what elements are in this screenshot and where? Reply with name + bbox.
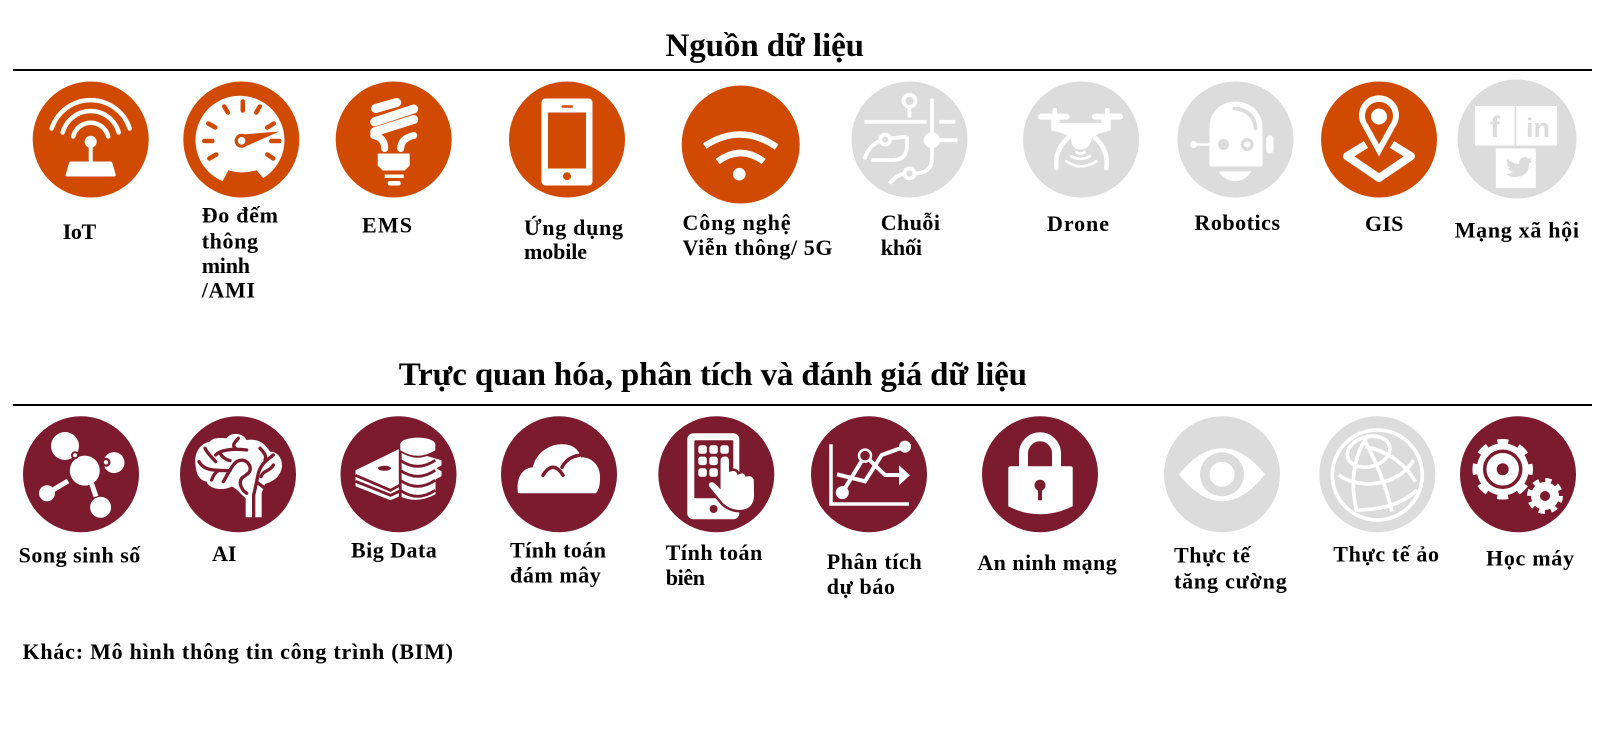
label: robotics: Robotics bbox=[1194, 210, 1280, 235]
label: cybersecurity: An ninh mạng bbox=[977, 550, 1117, 575]
label: smart meter: Đo đếm bbox=[202, 203, 278, 228]
label: edge computing: Tính toán bbox=[666, 540, 762, 565]
label: telecom 5G bbox=[682, 210, 832, 260]
icon: social media bbox=[1458, 80, 1576, 198]
label: mobile app: Ứng dụng bbox=[524, 215, 623, 240]
icon: EMS bulb bbox=[336, 82, 452, 198]
icon: GIS bbox=[1321, 82, 1437, 198]
label: predictive analytics: Phân tích bbox=[827, 549, 922, 574]
icon: edge computing bbox=[658, 416, 774, 532]
label: big data: Big Data bbox=[351, 537, 437, 562]
label: blockchain: Chuỗi bbox=[881, 210, 940, 235]
icon: machine learning gears bbox=[1460, 416, 1576, 532]
icon: predictive analytics bbox=[811, 416, 927, 532]
label: telecom 5G: Viễn thông/ 5G bbox=[682, 235, 832, 260]
label: mobile app bbox=[524, 215, 623, 264]
panel: visualization and analytics bbox=[19, 416, 1576, 599]
icon: augmented reality eye bbox=[1164, 416, 1280, 532]
icon: telecom 5G bbox=[682, 86, 800, 204]
icon: smart meter bbox=[183, 82, 299, 198]
icon: big data bbox=[340, 416, 456, 532]
label: AI: AI bbox=[212, 541, 236, 566]
label: digital twin: Song sinh số bbox=[19, 543, 141, 568]
label: augmented reality: Thực tế bbox=[1174, 543, 1251, 568]
label: augmented reality: tăng cường bbox=[1174, 568, 1287, 593]
label: GIS: GIS bbox=[1365, 211, 1403, 236]
note: other: Khác: Mô hình thông tin công trình (BIM) bbox=[22, 639, 453, 664]
label: smart meter bbox=[201, 203, 278, 303]
icon: social media: f bbox=[1490, 111, 1501, 144]
icon: social media: in bbox=[1526, 113, 1550, 143]
label: mobile app: mobile bbox=[524, 239, 587, 264]
label: edge computing: biên bbox=[666, 565, 705, 590]
icon: drone bbox=[1023, 82, 1139, 198]
label: virtual reality: Thực tế ảo bbox=[1333, 542, 1439, 567]
label: telecom 5G: Công nghệ bbox=[682, 210, 791, 235]
heading: visualization and analytics: Trực quan hóa, phân tích và đánh giá dữ liệu bbox=[399, 357, 1027, 393]
label: machine learning: Học máy bbox=[1486, 546, 1574, 571]
icon: AI brain bbox=[180, 416, 296, 532]
label: smart meter: thông bbox=[202, 228, 258, 253]
label: blockchain bbox=[881, 210, 940, 260]
label: augmented reality bbox=[1174, 543, 1287, 593]
label: smart meter: /AMI bbox=[201, 278, 255, 303]
label: predictive analytics bbox=[827, 549, 922, 599]
icon: blockchain bbox=[852, 82, 968, 198]
icon: mobile app bbox=[509, 82, 625, 198]
label: IoT: IoT bbox=[63, 219, 97, 244]
label: cloud computing: đám mây bbox=[510, 563, 601, 588]
icon: cloud computing bbox=[501, 416, 617, 532]
icon: virtual reality globe bbox=[1319, 416, 1435, 532]
label: EMS: EMS bbox=[362, 213, 412, 238]
label: social media: Mạng xã hội bbox=[1455, 218, 1579, 243]
icon: IoT bbox=[33, 82, 149, 198]
icon: robotics bbox=[1178, 82, 1294, 198]
label: cloud computing bbox=[510, 537, 606, 588]
panel: data sources bbox=[33, 80, 1579, 303]
label: blockchain: khối bbox=[881, 235, 922, 260]
label: edge computing bbox=[666, 540, 762, 590]
label: cloud computing: Tính toán bbox=[510, 537, 606, 562]
icon: cybersecurity bbox=[982, 416, 1098, 532]
icon: digital twin bbox=[23, 416, 139, 532]
label: smart meter: minh bbox=[202, 253, 250, 278]
label: predictive analytics: dự báo bbox=[827, 574, 895, 599]
label: drone: Drone bbox=[1047, 211, 1109, 236]
heading: data sources: Nguồn dữ liệu bbox=[666, 28, 864, 64]
